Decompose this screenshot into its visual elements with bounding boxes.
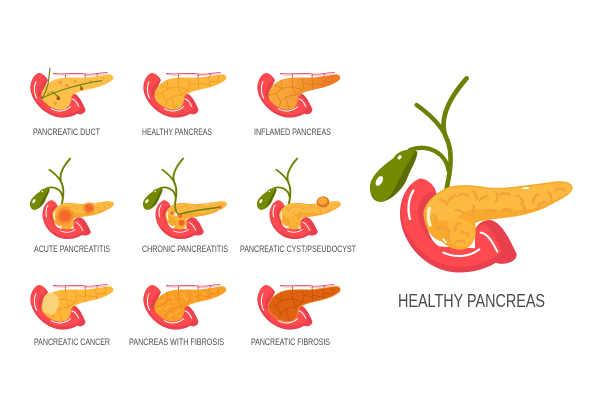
panel: chronic pancreatitis	[143, 159, 227, 239]
fibrosis cracks	[269, 287, 332, 321]
panel: inflamed pancreas	[257, 73, 340, 118]
panel: pancreatic cancer	[30, 285, 113, 330]
duct overlay	[175, 204, 220, 215]
label: pancreatic cancer: PANCREATIC CANCER	[34, 337, 110, 348]
tumour	[43, 293, 59, 315]
panel: pancreatic fibrosis	[257, 285, 340, 330]
duct overlay	[42, 68, 102, 98]
main heading: HEALTHY PANCREAS	[398, 290, 545, 311]
label: pancreatic fibrosis: PANCREATIC FIBROSIS	[251, 337, 330, 348]
fibrosis speckle	[158, 290, 215, 317]
panel: pancreatic cyst	[257, 159, 341, 239]
panel: pancreatic duct	[30, 68, 113, 118]
label: acute pancreatitis: ACUTE PANCREATITIS	[34, 244, 110, 255]
panel: acute pancreatitis	[30, 159, 114, 239]
label: chronic pancreatitis: CHRONIC PANCREATITIS	[142, 244, 228, 255]
label: inflamed pancreas: INFLAMED PANCREAS	[254, 127, 331, 138]
cyst	[317, 196, 329, 207]
duct dots	[57, 87, 83, 100]
orange acini dots	[47, 77, 105, 105]
label: pancreatic cyst: PANCREATIC CYST/PSEUDOCYST	[240, 244, 356, 255]
label: pancreatic duct: PANCREATIC DUCT	[33, 127, 100, 138]
panel: pancreas with fibrosis	[143, 285, 226, 330]
main illustration: healthy pancreas	[370, 78, 573, 272]
inflamed spots	[55, 201, 96, 226]
label: pancreas with fibrosis: PANCREAS WITH FIBROSIS	[129, 337, 224, 348]
calcification spots	[170, 205, 222, 226]
label: healthy pancreas small: HEALTHY PANCREAS	[142, 127, 212, 138]
panel: healthy pancreas small	[143, 73, 226, 118]
